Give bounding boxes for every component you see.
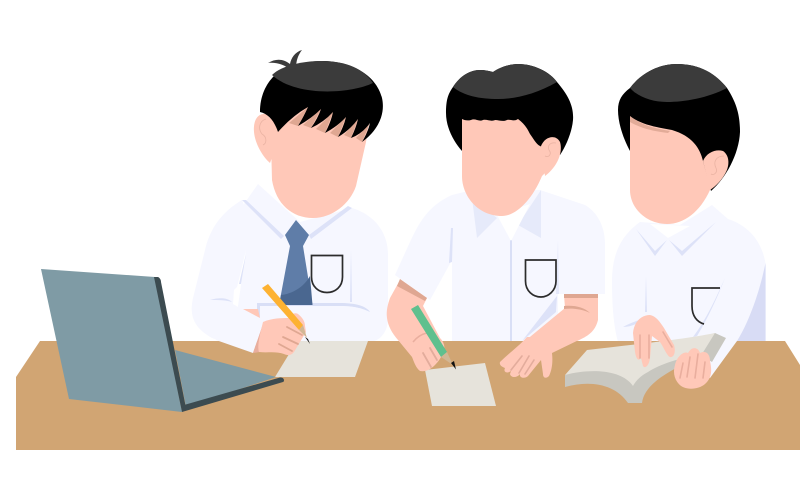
sleeve fold line <box>239 254 246 284</box>
side fold line <box>350 250 352 302</box>
torso and shoulders <box>612 205 766 342</box>
laptop screen back <box>41 269 182 412</box>
face <box>462 115 548 216</box>
laptop base edge <box>182 377 284 412</box>
forearm cuff line <box>257 303 370 318</box>
book cover <box>565 333 726 403</box>
hair highlight <box>272 61 373 91</box>
face <box>630 112 712 224</box>
tie <box>279 220 312 305</box>
pencil tip <box>305 337 310 344</box>
student 3: right <box>612 64 766 342</box>
hair highlight <box>630 64 727 102</box>
ear <box>703 150 728 190</box>
side fold <box>556 240 559 294</box>
pencil green <box>411 305 456 370</box>
right hand <box>500 337 585 378</box>
hair <box>618 64 740 191</box>
pencil wood <box>299 325 307 338</box>
hair shadow on forehead <box>289 107 370 142</box>
arm fold <box>693 278 725 337</box>
laptop keyboard base <box>175 350 276 407</box>
pencil wood <box>441 352 453 365</box>
face <box>270 100 372 218</box>
hand shadow <box>253 324 263 353</box>
button placket line <box>510 240 512 341</box>
hair forehead shadow <box>630 116 670 133</box>
knuckle lines <box>423 345 441 367</box>
open collar inner <box>497 204 530 241</box>
forearm wrinkle <box>210 298 232 302</box>
placket line <box>645 276 647 312</box>
shirt pocket <box>692 288 720 324</box>
elbow crease <box>564 306 590 313</box>
ear detail <box>545 143 556 157</box>
white gap between arm and torso <box>233 286 238 306</box>
right upper arm <box>525 295 598 350</box>
hair <box>260 61 383 142</box>
collar shadows <box>242 200 352 239</box>
laptop <box>41 269 284 412</box>
pencil body <box>411 305 447 357</box>
hand <box>258 313 306 355</box>
collar left <box>472 198 497 238</box>
book pages <box>565 333 715 386</box>
right hand <box>674 348 711 389</box>
right forearm <box>260 306 374 342</box>
sleeve shadow on right arm <box>564 294 598 298</box>
shirt body <box>205 184 388 342</box>
student 2 paper, hands and pencil <box>387 279 585 406</box>
under-arm shadow <box>522 296 557 341</box>
pencil body <box>262 284 303 330</box>
left sleeve <box>395 195 452 300</box>
wrist skin patch <box>243 309 260 318</box>
tie body <box>279 220 312 305</box>
laptop hinge edge <box>154 277 186 412</box>
shirt pocket <box>312 256 342 292</box>
hair <box>446 64 573 155</box>
finger lines <box>511 356 534 374</box>
tie shadow <box>279 276 312 305</box>
neck white <box>650 224 690 238</box>
ear <box>541 137 561 176</box>
student 3 sleeve, book and hands <box>565 315 737 403</box>
paper <box>425 363 496 406</box>
left hand <box>633 315 675 367</box>
student 1 sleeve, paper, hand and pencil <box>212 284 368 377</box>
ear detail <box>711 156 724 175</box>
student 2: middle <box>395 64 605 350</box>
left hand finger lines <box>640 332 672 358</box>
hand crease <box>413 333 427 342</box>
paper <box>275 341 368 377</box>
right side shadow <box>737 263 766 341</box>
left arm and hand <box>387 280 444 371</box>
right hand finger lines <box>680 354 705 378</box>
sleeve overlapping table <box>212 312 264 353</box>
collar right <box>518 190 541 238</box>
student 1: left, with tie <box>192 50 388 353</box>
ear <box>254 114 282 163</box>
shirt pocket <box>526 260 556 297</box>
left sleeve <box>192 200 264 353</box>
knuckle lines <box>279 327 302 351</box>
sleeve fold <box>449 228 453 263</box>
forearm crease <box>623 319 644 327</box>
sleeve shadow on arm <box>397 279 427 301</box>
sleeve over table <box>700 341 737 378</box>
ear detail <box>260 119 266 145</box>
collar shadows <box>636 222 716 256</box>
torso <box>452 190 605 341</box>
hair highlight <box>453 64 557 99</box>
pencil tip <box>451 361 456 370</box>
table <box>16 341 800 450</box>
pencil yellow <box>262 284 310 344</box>
cowlick <box>268 50 302 70</box>
